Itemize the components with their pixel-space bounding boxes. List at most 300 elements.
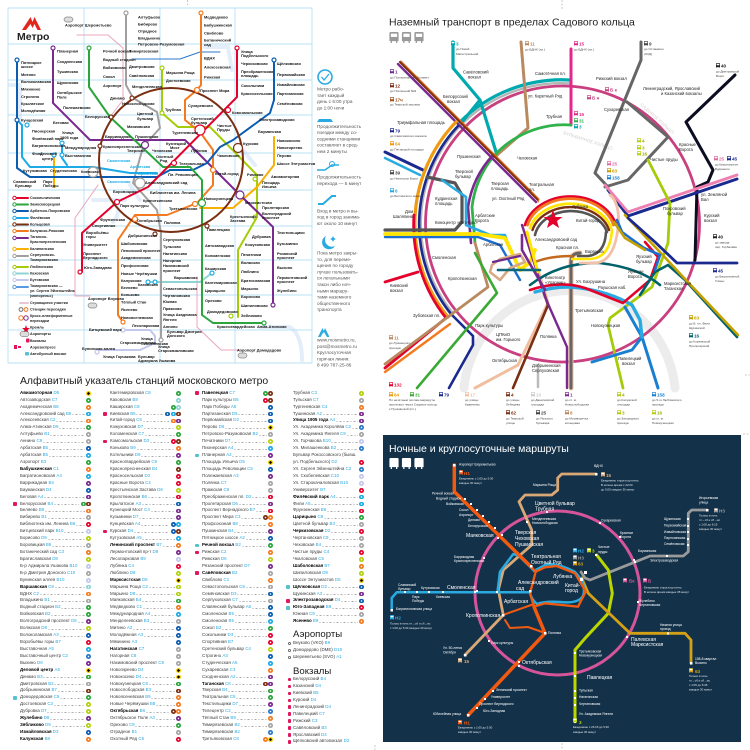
text: contacts: горячая линия: bbox=[317, 356, 350, 361]
text: transfer time: Продолжительность bbox=[317, 174, 362, 180]
index column 1: D9 bbox=[45, 722, 51, 727]
route labels bbox=[390, 470, 725, 726]
station names: пруды bbox=[598, 550, 608, 554]
index column 3: D6 bbox=[219, 424, 224, 429]
panel: night routes: Кропоткинская bbox=[466, 613, 500, 619]
route labels: H2 bbox=[578, 548, 584, 554]
index column 1: A5 bbox=[54, 667, 60, 672]
index column 3: Полежаевская bbox=[202, 473, 232, 478]
index column 1: B5 bbox=[43, 452, 48, 457]
route labels: Пролетарской bbox=[689, 344, 709, 348]
station names: Кузнецкий bbox=[166, 141, 187, 146]
index column 1: B2 bbox=[48, 681, 54, 686]
index column 2: Лубянка bbox=[110, 563, 127, 568]
station names: Марьина Роща bbox=[166, 70, 195, 75]
route labels: (Ж/Д) bbox=[644, 52, 652, 56]
index column 3: D7 bbox=[225, 438, 230, 443]
station names: Лермонтовский bbox=[277, 275, 308, 280]
index column 4: Ул. Сергея Эйзенштейна bbox=[293, 466, 344, 471]
index column 3: B6 bbox=[233, 397, 239, 402]
index column 3: B4 bbox=[222, 687, 228, 692]
station names: Текстильщики bbox=[277, 230, 305, 235]
index column 4: D9 bbox=[322, 570, 328, 575]
route labels: Новокузнецкая bbox=[652, 421, 674, 425]
station names: Театральная bbox=[179, 161, 204, 166]
route schedules: Ежедневно и круглосуточно. bbox=[644, 586, 682, 590]
station names: Краснопресненская bbox=[103, 144, 141, 149]
index column 2: Новокузнецкая bbox=[110, 681, 141, 686]
station names: Бабушкинская bbox=[204, 22, 232, 27]
index column 4: Ясенево bbox=[293, 618, 312, 623]
legend: metro lines: Каховская bbox=[30, 272, 49, 276]
index column 1: Ботанический сад bbox=[20, 549, 57, 554]
panel: night routes: Чеховская bbox=[515, 536, 539, 542]
route labels: 11 bbox=[394, 336, 399, 340]
station names: Победы bbox=[43, 183, 59, 188]
index column 2: C5 bbox=[138, 736, 144, 741]
index column 4: Ул. Милашенкова bbox=[293, 445, 330, 450]
station names: Красногвардейская bbox=[217, 324, 255, 329]
station names: Каховская bbox=[138, 282, 158, 287]
route labels: до ст. м. bbox=[652, 416, 664, 420]
index column 3: Смоленская bbox=[202, 618, 227, 623]
index column 2: D4 bbox=[128, 528, 133, 533]
station names: Менделеевская bbox=[532, 517, 556, 521]
station and stop names: Пушкинская bbox=[457, 154, 481, 159]
index column 3: Печатники bbox=[202, 438, 224, 443]
station names: Чеховская bbox=[152, 148, 172, 153]
index column 3: Смоленская bbox=[202, 611, 227, 616]
station names: Волгоградский bbox=[262, 211, 292, 216]
index column 2: B6 bbox=[142, 494, 147, 499]
index column 4: Тургеневская bbox=[293, 404, 320, 409]
index column 1: Бауманская bbox=[20, 487, 45, 492]
index column 2: A4 bbox=[145, 611, 150, 616]
station names: улица bbox=[699, 500, 708, 504]
index column 1: D8 bbox=[44, 715, 49, 720]
route labels: площади bbox=[531, 402, 544, 406]
pale ring bands and labels: САДОВОЕ КОЛЬЦО bbox=[639, 102, 675, 135]
index column 2: Марксистская bbox=[110, 577, 141, 582]
index column 2: Красные Ворота bbox=[110, 480, 144, 485]
station names: Волжская bbox=[241, 260, 260, 265]
index column 3: Третьяковская bbox=[202, 736, 232, 741]
panel: night routes: Китай- bbox=[565, 582, 581, 589]
marker: Kremlin star bbox=[544, 210, 562, 228]
route labels: 1 bbox=[570, 392, 573, 398]
panel: night routes: Павлецкая bbox=[587, 675, 613, 681]
station names: Алма-Атинская bbox=[257, 324, 287, 329]
icon: train bbox=[317, 119, 333, 122]
index column 2: Новогиреево bbox=[110, 667, 137, 672]
legend: metro lines: Кольцевая bbox=[30, 223, 50, 227]
index column 2: B8 bbox=[150, 701, 155, 706]
index column 4: Шипиловская bbox=[293, 570, 321, 575]
route schedules: Только в ночь bbox=[689, 674, 708, 678]
list: railway stations: Киевский B5 bbox=[293, 690, 319, 695]
index column 1: C10 bbox=[67, 570, 75, 575]
station names: Черкизовская bbox=[241, 61, 268, 66]
index column 3: A5 bbox=[231, 404, 236, 409]
route labels: 4 bbox=[642, 138, 645, 144]
station names: Водный стадион bbox=[436, 496, 461, 500]
index column 1: A5 bbox=[48, 646, 54, 651]
index column 1: Академическая bbox=[20, 404, 52, 409]
station names: Новокузнецкая bbox=[579, 654, 602, 658]
station names: Алексеевская bbox=[204, 65, 231, 70]
station names: Багратионовская улица bbox=[396, 607, 432, 611]
index column 3: B2 bbox=[235, 542, 241, 547]
index column 2: Кузьминки bbox=[110, 514, 132, 519]
station names: Нагорная bbox=[163, 258, 181, 263]
route labels: 4 bbox=[622, 392, 625, 398]
station names: Воробьёвы bbox=[86, 230, 109, 235]
index column 3: Сходненская bbox=[202, 674, 229, 679]
legend: metro lines: Филёвская bbox=[30, 216, 50, 220]
index column 4: D2 bbox=[331, 459, 337, 464]
route labels: пролегают через Садовое кольцо bbox=[389, 402, 437, 406]
index column 3: Речной вокзал bbox=[202, 542, 234, 547]
panel: night routes: Палевская bbox=[631, 637, 656, 643]
index column 3: Рижская bbox=[202, 549, 220, 554]
legend: metro lines: Кремль bbox=[30, 326, 45, 330]
index column 1: C9 bbox=[36, 438, 42, 443]
legend: metro lines: Кросс-платформенные bbox=[30, 314, 73, 318]
station names: Новокузнецкая bbox=[204, 196, 233, 201]
index column 2: Коломенская bbox=[110, 431, 137, 436]
index column 1: Дубровка bbox=[20, 708, 40, 713]
index column 4: Ул. Старокачаловская bbox=[293, 480, 339, 485]
index column 4: B9 bbox=[313, 618, 318, 623]
index column 3: B5 bbox=[228, 611, 234, 616]
station names: Семёновская bbox=[277, 101, 303, 106]
index column 3: Тёплый Стан bbox=[202, 715, 229, 720]
route labels: 45 bbox=[732, 156, 738, 162]
station names: Люблино bbox=[241, 269, 260, 274]
station names: Краснопресненская bbox=[454, 559, 484, 563]
station names: Кунцевская bbox=[21, 117, 43, 122]
station names: Калужская bbox=[121, 278, 141, 283]
station names: Новогиреево bbox=[277, 145, 303, 150]
station names: Белорусская bbox=[85, 114, 110, 119]
index column 4: Южная bbox=[293, 611, 308, 616]
index column 1: Воробьёвы горы bbox=[20, 639, 54, 644]
station names: горы bbox=[86, 234, 96, 239]
index column 2: D3 bbox=[144, 438, 149, 443]
route labels: 79 bbox=[444, 392, 450, 398]
station and stop names: Сухаревская bbox=[604, 107, 629, 112]
route labels: бульвара bbox=[536, 421, 550, 425]
index column 4: B6 bbox=[321, 507, 326, 512]
index column 1: B8 bbox=[45, 736, 50, 741]
route labels: проезда bbox=[617, 421, 629, 425]
station names: Шаболовская bbox=[121, 241, 147, 246]
route labels: к Пушкинской (пл.) bbox=[389, 407, 416, 411]
route labels: 63 bbox=[612, 168, 618, 174]
station names: Пл. Революции bbox=[168, 172, 198, 177]
index column 3: A2 bbox=[226, 452, 232, 457]
index column 4: Бульвар Рокоссовского (бывш. bbox=[293, 452, 357, 457]
station names: Нагатинская bbox=[579, 695, 598, 699]
station and stop names: Дом bbox=[405, 209, 413, 214]
list: railway stations: Курский D4 bbox=[293, 697, 316, 702]
station names: Савёловская bbox=[129, 73, 154, 78]
route labels: до ст. м. bbox=[565, 398, 577, 402]
index column 4: Ул. Академика Янгеля bbox=[293, 431, 339, 436]
index column 3: Профсоюзная bbox=[202, 521, 231, 526]
route schedules: до 5:00 каждые 30 минут bbox=[601, 488, 635, 492]
index column 4: Тульская bbox=[293, 397, 312, 402]
text: night transport: лучше пользовать- bbox=[317, 269, 359, 274]
station names: Улица Академика bbox=[163, 312, 197, 317]
station names: Севастопольская bbox=[163, 286, 197, 291]
station names: Войковская bbox=[103, 65, 126, 70]
station names: Щёлковская bbox=[277, 61, 301, 66]
route labels: 15 bbox=[579, 112, 585, 117]
route labels: 17 bbox=[470, 392, 476, 398]
station and stop names: Парк культуры bbox=[475, 323, 503, 328]
route labels: 40 bbox=[721, 64, 727, 68]
index column 3: C6 bbox=[233, 736, 239, 741]
index column 4: C5 bbox=[318, 556, 324, 561]
station names: Каширская bbox=[205, 266, 226, 271]
index column 1: Зябликово bbox=[20, 722, 44, 727]
index column 1: Авиамоторная bbox=[20, 390, 52, 395]
route labels: 10 bbox=[536, 392, 542, 398]
legend: metro lines: Тимирязевская bbox=[30, 258, 58, 262]
index column 1: Бабушкинская bbox=[20, 466, 52, 471]
index column 1: B10 bbox=[70, 563, 77, 568]
station names: Ботанический bbox=[204, 38, 232, 43]
text: night transport: транспорта bbox=[317, 307, 342, 312]
station names: Отрадное bbox=[138, 28, 158, 33]
index column 1: Войковская bbox=[20, 611, 44, 616]
index column 4: C9 bbox=[340, 431, 346, 436]
station names bbox=[396, 462, 718, 716]
route labels: 39 bbox=[395, 170, 401, 176]
station and stop names: Покровский bbox=[663, 206, 686, 211]
index column 3: C5 bbox=[247, 466, 253, 471]
index column 1: A3 bbox=[53, 632, 59, 637]
station names: Адмирала Ушакова bbox=[138, 358, 176, 363]
index column 3: D5 bbox=[239, 459, 245, 464]
station names: Проспект Вернадского bbox=[479, 702, 514, 706]
index column 3: Первомайская bbox=[202, 417, 232, 422]
station names: Митино bbox=[21, 72, 36, 77]
index column 4: A5 bbox=[305, 501, 311, 506]
index column 3: Текстильщики bbox=[202, 701, 231, 706]
index column 2: D4 bbox=[136, 674, 141, 679]
index column 3: D2 bbox=[233, 417, 239, 422]
station names: Тульская bbox=[163, 244, 181, 249]
index column 1: B1 bbox=[44, 597, 50, 602]
index column 2: Красносельская bbox=[110, 473, 143, 478]
route labels: 64 bbox=[395, 142, 401, 146]
station and stop names: Трубная bbox=[546, 114, 562, 119]
index column 3: B9 bbox=[230, 715, 236, 720]
index column 1: B3 bbox=[41, 459, 46, 464]
station and stop names: Арбатская bbox=[483, 242, 503, 247]
station and stop names: Раушская наб. bbox=[598, 285, 626, 290]
station names: проезд bbox=[660, 627, 671, 631]
route labels: 63 bbox=[578, 562, 584, 566]
route labels: 4 bbox=[511, 392, 514, 398]
route labels: до Тверской заставы bbox=[390, 102, 421, 106]
station names: Речной вокзал bbox=[103, 49, 132, 54]
route labels: пер. Горбачёва bbox=[715, 245, 737, 249]
station names: Славянский bbox=[398, 583, 416, 587]
route labels: 62 bbox=[511, 410, 517, 416]
index column 2: Новоясеневская bbox=[110, 694, 144, 699]
list: airports: Шереметьево (SVO) A1 bbox=[293, 654, 342, 659]
station names: Библиотека им. Ленина bbox=[150, 190, 196, 195]
route labels: улицы bbox=[506, 421, 516, 425]
index column 2: Новые Черёмушки bbox=[110, 701, 149, 706]
index column 2: C6 bbox=[142, 681, 148, 686]
route schedules: с 1:05 до 5:45 bbox=[689, 683, 708, 687]
route schedules: каждые 30 минут bbox=[458, 730, 482, 734]
index column 4: Тушинская bbox=[293, 411, 315, 416]
index column 2: B6 bbox=[140, 708, 145, 713]
index column 2: Нагатинская bbox=[110, 646, 137, 651]
text: night transport: тами наземного bbox=[317, 295, 352, 300]
text: entrance: ют около 10 минут bbox=[317, 221, 358, 226]
station names: Сокол bbox=[459, 508, 468, 512]
station names: Третьяковская bbox=[579, 650, 601, 654]
route schedules: с 1:00 до 5:30 каждые 30 минут bbox=[390, 626, 433, 630]
station names: Трубная bbox=[165, 107, 181, 112]
station names: Деловой bbox=[40, 151, 57, 156]
index column 2: B1 bbox=[132, 729, 137, 734]
route labels: площади bbox=[617, 402, 630, 406]
index column 4: Улица 1905 года bbox=[293, 417, 328, 422]
station names: Динамо bbox=[110, 96, 126, 101]
route labels: до Дмитровской bbox=[716, 70, 739, 74]
station names: Мост bbox=[170, 145, 180, 150]
index column 2: Мякинино bbox=[110, 639, 130, 644]
station names: Аннино bbox=[163, 324, 178, 329]
icon: clock check bbox=[318, 70, 332, 84]
station and stop names: Белорусский bbox=[443, 94, 468, 99]
text: night transport: такси либо ноч- bbox=[317, 282, 352, 287]
station and stop names: бульвар bbox=[455, 174, 471, 179]
index column 2: Лесопарковая bbox=[110, 556, 139, 561]
logo: metro bbox=[17, 17, 49, 43]
route labels: до Яузского bbox=[536, 416, 553, 420]
index column 1: Баррикадная bbox=[20, 480, 47, 485]
index column 2: Медведково bbox=[110, 604, 135, 609]
index column 2: Марьино bbox=[110, 591, 128, 596]
route labels: Кравченко bbox=[465, 402, 480, 406]
index column 3: B8 bbox=[232, 521, 238, 526]
index column 1: Калужская bbox=[20, 736, 43, 741]
station names: Чертановская bbox=[639, 603, 660, 607]
route labels: H3 bbox=[578, 556, 584, 560]
station names: Аэропорт bbox=[103, 83, 122, 88]
index column 2: Нахимовский проспект bbox=[110, 660, 157, 665]
panel: night routes: Трубная bbox=[535, 506, 554, 512]
route labels: Б bbox=[648, 578, 652, 584]
station names: Подбельского bbox=[241, 53, 269, 58]
station and stop names: вокзал bbox=[622, 361, 636, 366]
index column 2: A3 bbox=[138, 632, 143, 637]
station names: Студенческая bbox=[50, 168, 77, 173]
panel: night routes: город bbox=[565, 588, 578, 594]
station names: Чертановская bbox=[163, 293, 190, 298]
station names: Бульвар bbox=[138, 354, 155, 359]
station names: Красносельская bbox=[241, 91, 272, 96]
station and stop names: Яузский bbox=[636, 254, 652, 259]
station and stop names: ул. Земляной bbox=[701, 192, 728, 197]
station names: площадь bbox=[241, 73, 259, 78]
index column 4: C2 bbox=[346, 466, 351, 471]
index column 1: Библиотека им. Ленина bbox=[20, 521, 69, 526]
route schedules: каждые 30 минут bbox=[573, 730, 597, 734]
index column 1: B3 bbox=[37, 674, 43, 679]
station names: Преображенская bbox=[241, 69, 273, 74]
index column 3: Строгино bbox=[202, 653, 221, 658]
station names: Крылатское bbox=[21, 101, 45, 106]
index column 3: Семёновская bbox=[202, 591, 230, 596]
text: working hours: Метро рабо- bbox=[317, 86, 345, 92]
station and stop names: Ворота bbox=[628, 274, 643, 279]
route labels: до Новой bbox=[456, 47, 470, 51]
index column 2: Курская bbox=[110, 528, 126, 533]
route labels: кольцевая bbox=[565, 421, 580, 425]
station names: Южная bbox=[163, 299, 177, 304]
index column 2: B9 bbox=[145, 694, 151, 699]
index column 2: Орехово bbox=[110, 722, 128, 727]
station names: Щукинская bbox=[57, 80, 78, 85]
index column 3: D3 bbox=[228, 632, 233, 637]
station names: Волоколамская bbox=[21, 79, 51, 84]
text: contacts: 8 499 787-25-86 bbox=[317, 363, 352, 368]
route labels: до БДНХ (пл.) bbox=[574, 48, 594, 52]
legend: metro lines: Калужско-Рижская bbox=[30, 229, 64, 233]
index column 1: Волжская bbox=[20, 625, 40, 630]
index column 4: C9 bbox=[309, 611, 315, 616]
index column 1: ВДНХ bbox=[20, 591, 32, 596]
station names: Университет bbox=[491, 695, 511, 699]
route schedules: В ночное время с 22:00 bbox=[601, 483, 633, 487]
text: entrance: ход в город занима- bbox=[317, 215, 361, 220]
route labels: 158 bbox=[657, 392, 665, 398]
station names: Щукинская bbox=[664, 517, 681, 521]
metro lines bbox=[17, 13, 274, 350]
index column 1: B6 bbox=[46, 542, 51, 547]
index column 2: A3 bbox=[149, 715, 155, 720]
index column 2: Кузнецкий Мост bbox=[110, 507, 143, 512]
station names: Римская bbox=[247, 172, 263, 177]
panel: night routes: Маяковская bbox=[466, 533, 494, 539]
station names: Братиславская bbox=[241, 278, 270, 283]
index column 1: Белорусская bbox=[20, 501, 46, 506]
station names: Печатники bbox=[241, 252, 262, 257]
list: railway stations: Белорусский B4 bbox=[293, 676, 326, 681]
index column 3: Римская bbox=[202, 556, 220, 561]
station names: Старокачаловская bbox=[120, 340, 156, 345]
index column 3: C7 bbox=[221, 480, 226, 485]
index column 3: B2 bbox=[234, 729, 240, 734]
text: contacts: Круглосуточная bbox=[317, 350, 352, 355]
index column 2: C5 bbox=[136, 417, 142, 422]
station names: Киевская bbox=[436, 595, 450, 599]
station names: Маяковская bbox=[127, 124, 150, 129]
index column 1: C2 bbox=[33, 591, 39, 596]
index column 4: B7 bbox=[324, 563, 330, 568]
route labels: до 5-го Люблинского bbox=[652, 398, 682, 402]
index column 4: A3 bbox=[317, 591, 322, 596]
